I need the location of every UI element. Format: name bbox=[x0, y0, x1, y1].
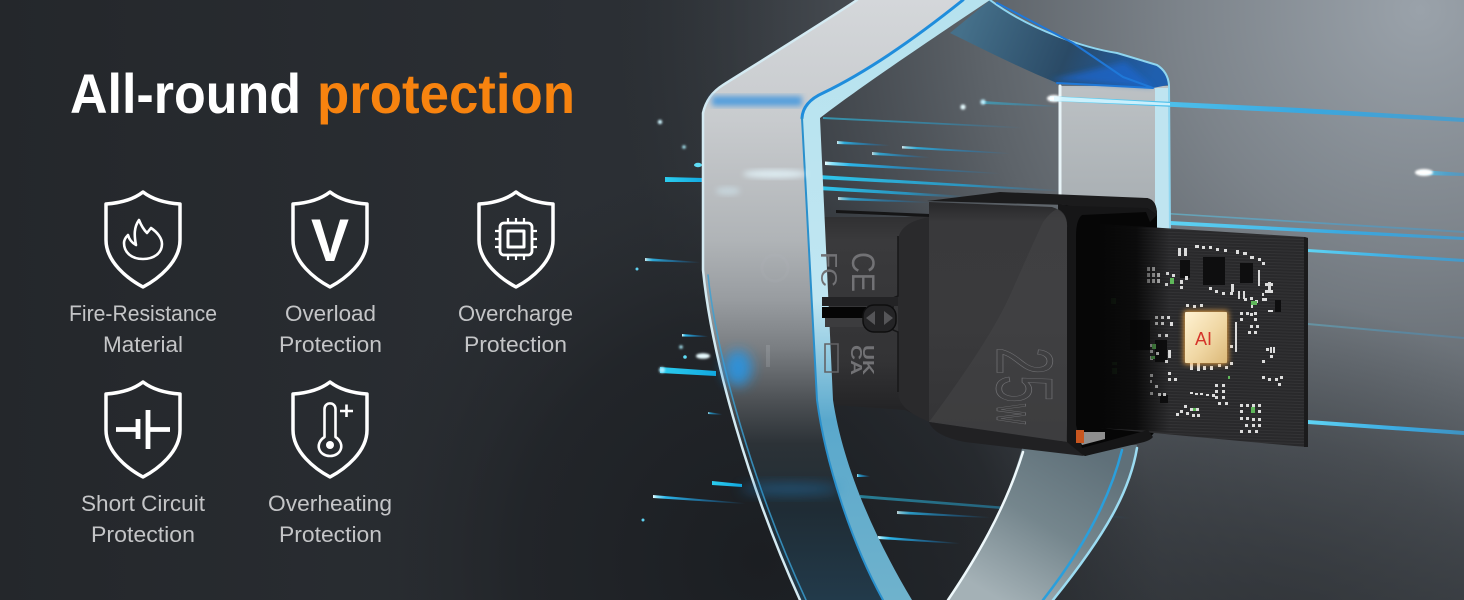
shadow fading board into housing bbox=[1095, 222, 1172, 432]
plug slider and slot bbox=[822, 297, 898, 332]
streaks inside the shield bbox=[818, 99, 1060, 203]
label: overheating protection bbox=[268, 491, 392, 547]
charger wattage 25w: 25 bbox=[980, 347, 1069, 403]
charger wattage 25w: w bbox=[985, 403, 1045, 425]
right band outer rim bbox=[1155, 88, 1170, 236]
title: All-round bbox=[70, 62, 301, 125]
certification marks: FC bbox=[816, 252, 842, 287]
label: overheating protection: Overheating bbox=[268, 491, 392, 516]
charger orange connector detail bbox=[1076, 430, 1105, 445]
icon: thermometer shield bbox=[293, 382, 367, 477]
icon: short circuit shield bbox=[106, 382, 180, 477]
title: protection bbox=[317, 62, 575, 125]
feature: overcharge protection bbox=[458, 192, 573, 357]
certification marks: CE bbox=[845, 252, 881, 292]
label: short circuit protection: Protection bbox=[91, 522, 195, 547]
label: overload protection: Overload bbox=[285, 301, 376, 326]
icon: chip shield bbox=[479, 192, 553, 287]
charger lower bevel bbox=[929, 422, 1084, 456]
left band inner rim bbox=[802, 0, 990, 600]
label: fire-resistance material: Material bbox=[103, 332, 183, 357]
label: overload protection: Protection bbox=[279, 332, 382, 357]
lower right band of shield bbox=[948, 445, 1137, 600]
feature: overheating protection bbox=[268, 382, 392, 547]
shield edge highlights bbox=[703, 0, 1170, 600]
label: fire-resistance material: Fire-Resistance bbox=[69, 301, 217, 326]
certification marks bbox=[816, 252, 881, 376]
label: overcharge protection: Protection bbox=[464, 332, 567, 357]
charger bbox=[816, 192, 1308, 456]
charger front rim bbox=[1058, 204, 1157, 456]
charger rear with plug bbox=[790, 210, 935, 424]
AI chip: AI bbox=[1195, 329, 1212, 349]
top right bevel of shield bbox=[950, 0, 1168, 88]
feature: fire-resistance material bbox=[69, 192, 217, 357]
icon: voltage shield bbox=[293, 192, 367, 287]
icon: voltage shield: V bbox=[311, 207, 349, 274]
charger interior bbox=[1060, 198, 1157, 456]
label: overcharge protection: Overcharge bbox=[458, 301, 573, 326]
certification marks: CA bbox=[847, 345, 864, 376]
feature: short circuit protection bbox=[81, 382, 206, 547]
board components bbox=[1130, 257, 1281, 403]
right band of shield bbox=[1060, 86, 1170, 235]
circuit board bbox=[1095, 222, 1308, 447]
label: short circuit protection bbox=[81, 491, 206, 547]
main light streak over shield bbox=[1047, 95, 1464, 122]
streaks to the right of the shield bbox=[1170, 169, 1464, 435]
certification marks: UK bbox=[859, 345, 876, 376]
streaks left of the shield bbox=[636, 120, 716, 376]
feature: overload protection bbox=[279, 192, 382, 357]
streaks along the bottom bbox=[642, 412, 1130, 544]
label: overload protection bbox=[279, 301, 382, 357]
light streaks bbox=[636, 99, 1464, 544]
left band of shield bbox=[703, 0, 963, 600]
label: short circuit protection: Short Circuit bbox=[81, 491, 206, 516]
charger top lid bbox=[927, 192, 1157, 215]
label: overcharge protection bbox=[458, 301, 573, 357]
label: overheating protection: Protection bbox=[279, 522, 382, 547]
label: fire-resistance material bbox=[69, 301, 217, 357]
title bbox=[70, 62, 575, 125]
icon: fire shield bbox=[106, 192, 180, 287]
AI chip bbox=[1184, 311, 1228, 364]
charger main face bbox=[929, 202, 1067, 442]
glow and reflections on shield bbox=[712, 96, 840, 494]
glass shield bbox=[703, 0, 1170, 600]
